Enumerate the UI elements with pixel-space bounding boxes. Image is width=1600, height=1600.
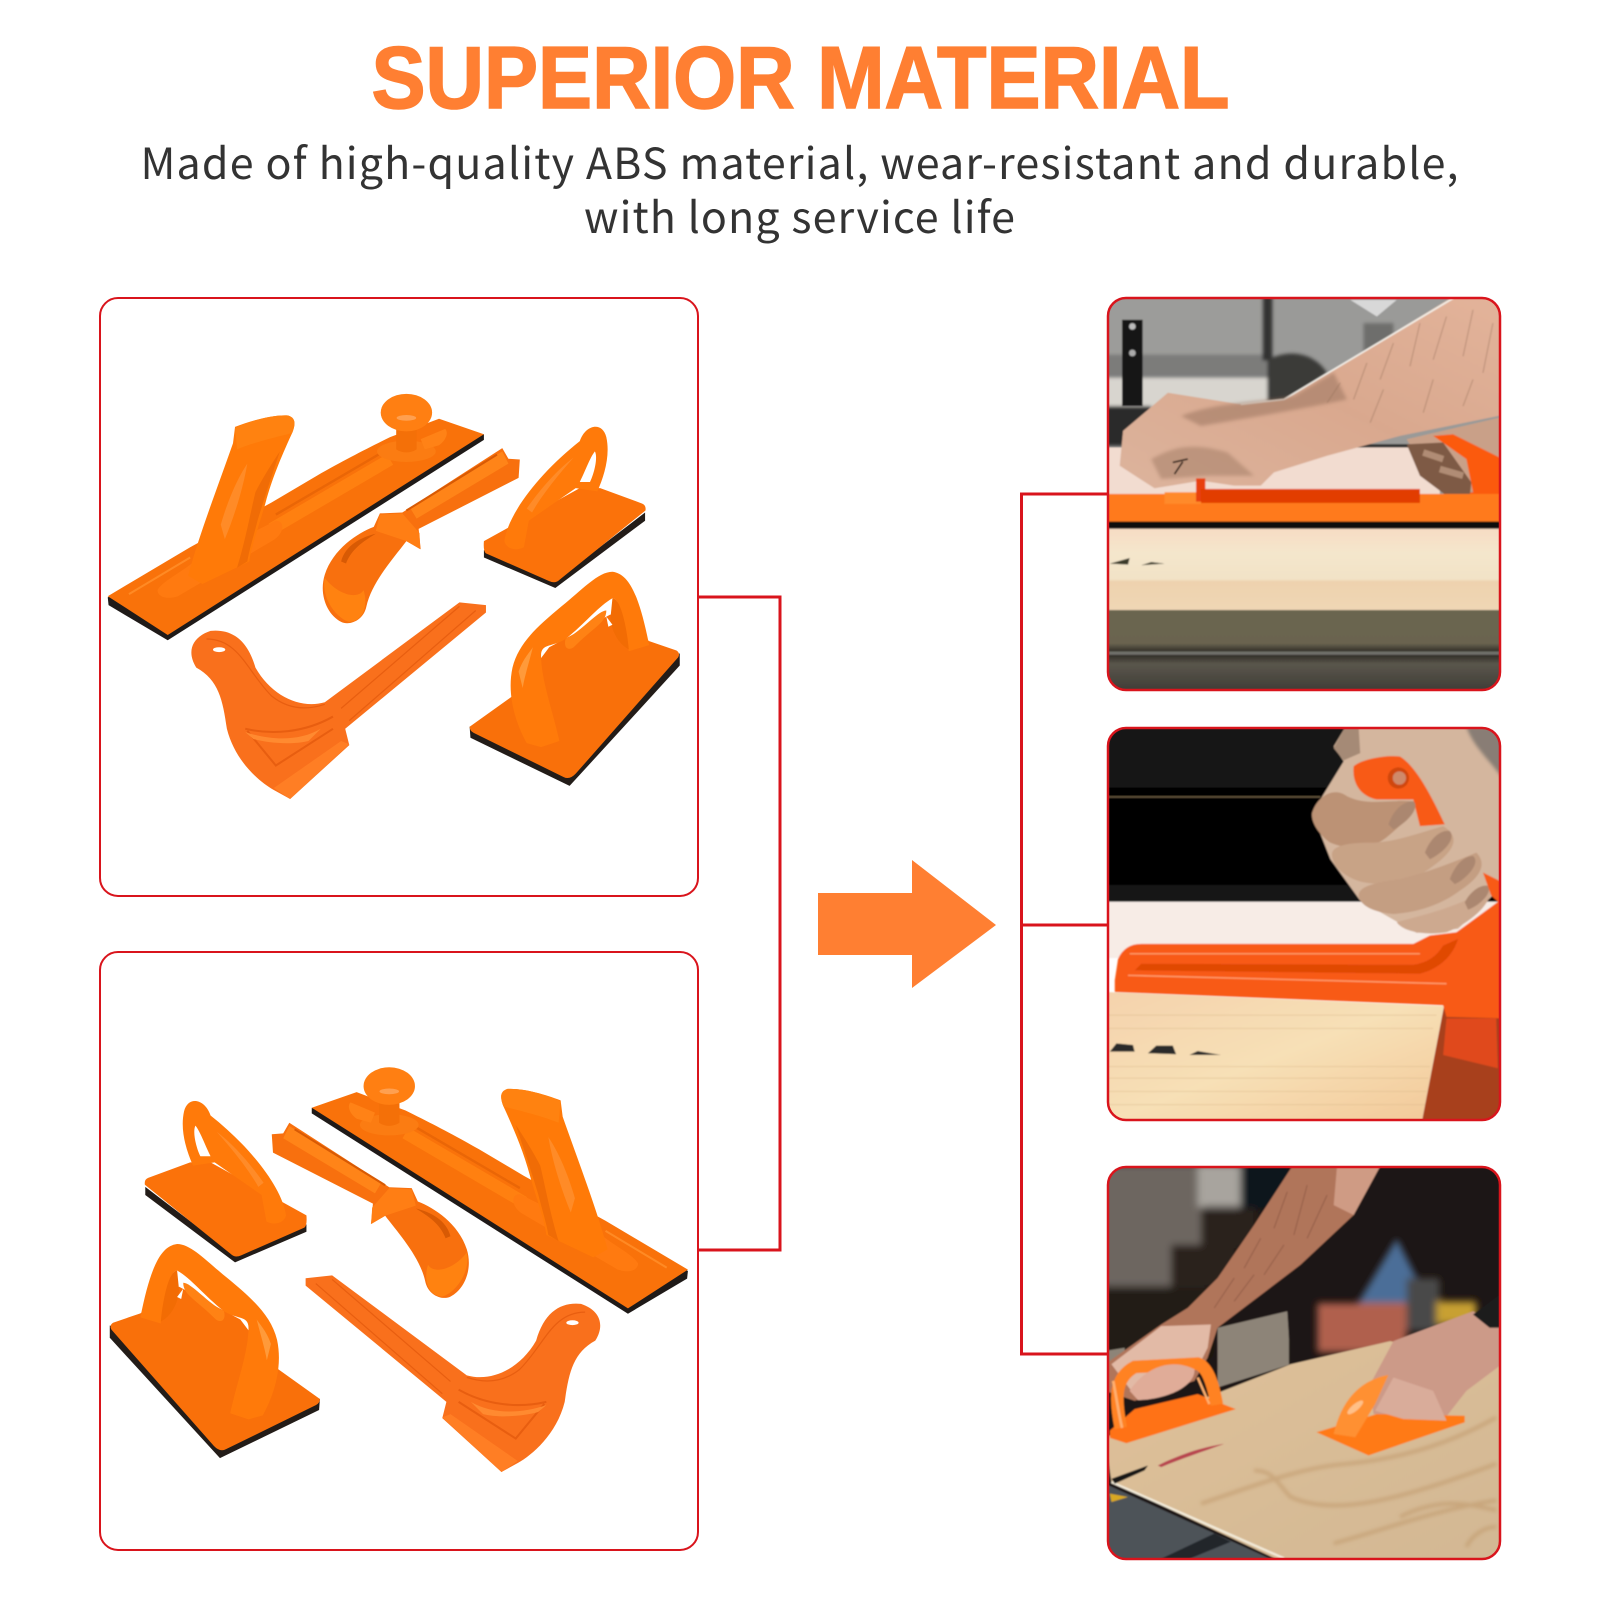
product tools top [108, 394, 680, 799]
product tools bottom [110, 1067, 688, 1472]
subtitle: with long service life [584, 184, 1015, 246]
arrow [818, 860, 996, 988]
subtitle [140, 130, 1458, 246]
left bracket connector [698, 597, 780, 1250]
small stick mirrored [272, 1123, 469, 1298]
small stick [323, 448, 520, 623]
title: SUPERIOR MATERIAL [372, 28, 1230, 127]
panel: product set top [100, 298, 698, 896]
long push stick mirrored [306, 1275, 600, 1472]
photo 2: fist gripping push stick [1105, 724, 1506, 1123]
right bracket connector [1022, 494, 1108, 1354]
large push block [470, 572, 680, 786]
panel: product set bottom [100, 952, 698, 1550]
long push block mirrored [312, 1067, 688, 1314]
photo 1: hand on push block [1105, 294, 1506, 693]
long push block [108, 394, 484, 640]
small push block mirrored [145, 1101, 307, 1262]
photo 3: two hands on push blocks [1102, 1164, 1506, 1565]
long push stick [191, 602, 486, 799]
small push block [484, 427, 646, 588]
subtitle: Made of high-quality ABS material, wear-resistant and durable, [140, 130, 1458, 192]
large push block mirrored [110, 1244, 320, 1458]
